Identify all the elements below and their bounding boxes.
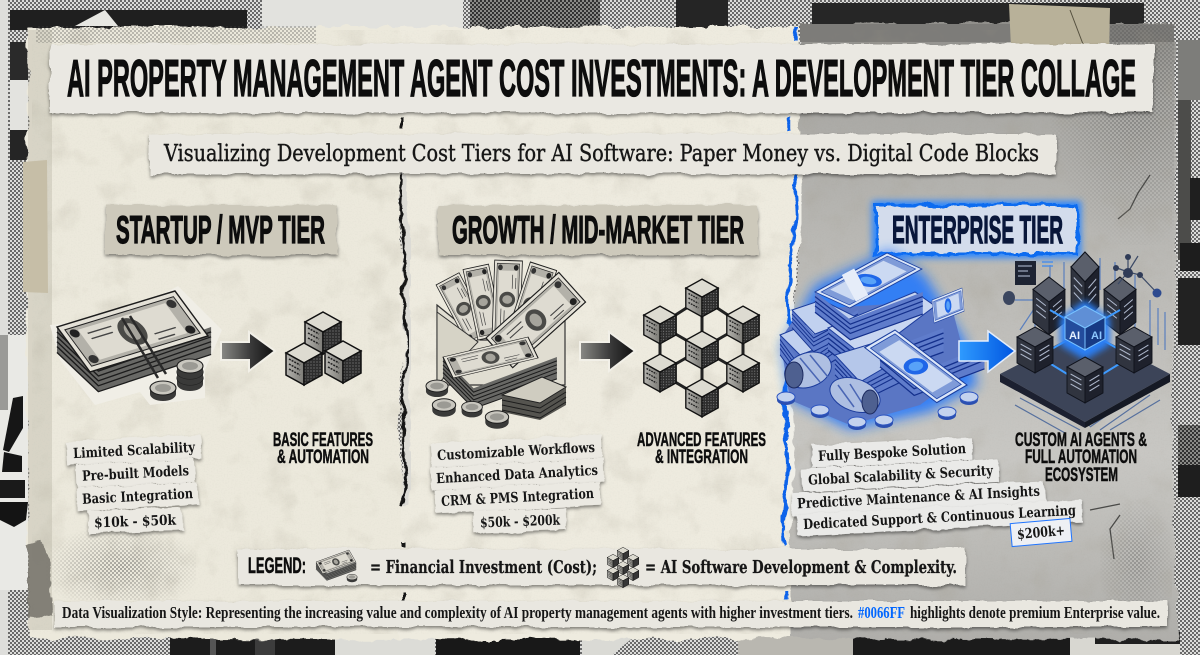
tier heading: enterprise: [872, 201, 1081, 258]
label: basic features: & AUTOMATION: [277, 447, 369, 468]
subtitle: [149, 134, 1056, 174]
icon: three code cubes: [286, 312, 361, 385]
legend: = Financial Investment (Cost);: [370, 557, 597, 578]
label: advanced features: [637, 430, 766, 468]
subtitle: Visualizing Development Cost Tiers for AI Software: Paper Money vs. Digital Code Blocks: [163, 141, 1039, 167]
bullets: startup: $10k - $50k: [94, 513, 177, 531]
bullets: growth: [430, 435, 605, 534]
tape strips: [23, 4, 1110, 293]
bullets: enterprise: Dedicated Support & Continuous Learning: [803, 503, 1076, 533]
bullets: startup: Pre-built Models: [82, 463, 189, 485]
arrow: enterprise: [959, 331, 1015, 372]
bullets: enterprise: Fully Bespoke Solution: [818, 441, 966, 465]
legend: LEGEND:: [248, 553, 306, 578]
icon: AI automation ecosystem: AI: [1091, 330, 1102, 342]
label: basic features: BASIC FEATURES: [273, 430, 373, 451]
bullets: startup: Limited Scalability: [73, 440, 196, 462]
footer note: Data Visualization Style: Representing the increasing value and complexity of AI property management agents with higher investment tiers.: [62, 603, 853, 622]
label: advanced features: ADVANCED FEATURES: [637, 430, 766, 451]
legend: [238, 547, 965, 588]
torn divider: startup / growth: [400, 118, 410, 600]
bullets: enterprise: Predictive Maintenance & AI Insights: [797, 484, 1040, 512]
bullets: growth: $50k - $200k: [480, 513, 561, 531]
label: custom AI agents: FULL AUTOMATION: [1025, 447, 1137, 468]
icon: enterprise money pile with blue glow: [777, 250, 984, 430]
arrow: growth: [580, 332, 635, 371]
icon: startup money stack with coins: [50, 286, 222, 405]
tier heading: startup: STARTUP / MVP TIER: [116, 209, 325, 252]
footer note: [54, 601, 1166, 627]
legend icon: money: [316, 550, 357, 582]
bullets: startup: Basic Integration: [82, 486, 193, 508]
icon: AI automation ecosystem: AI: [1069, 330, 1080, 342]
bullets: startup: [66, 435, 202, 534]
footer note: #0066FF: [858, 603, 905, 622]
bullets: enterprise: $200k+: [1016, 523, 1066, 543]
label: custom AI agents: ECOSYSTEM: [1045, 465, 1118, 486]
icon: connected code cubes: [644, 279, 759, 417]
bullets: growth: Customizable Workflows: [437, 440, 595, 464]
tier heading: startup: [105, 205, 337, 255]
panel: growth paper: [398, 27, 802, 640]
label: advanced features: & INTEGRATION: [655, 447, 748, 468]
icon: envelope with money: [426, 260, 586, 429]
icon: AI automation ecosystem: [1000, 252, 1170, 433]
bullets: enterprise: Global Scalability & Security: [808, 463, 994, 489]
tier heading: growth: [438, 205, 758, 255]
panel: enterprise paper: [790, 24, 1178, 640]
panel: startup paper: [26, 27, 410, 640]
tier heading: growth: GROWTH / MID-MARKET TIER: [452, 209, 744, 252]
label: custom AI agents: [1015, 430, 1147, 486]
label: basic features: [273, 430, 373, 468]
bullets: enterprise: [792, 437, 1082, 547]
bullets: growth: CRM & PMS Integration: [441, 486, 594, 510]
arrow: startup: [221, 332, 275, 371]
torn divider: blue enterprise edge: [782, 28, 800, 600]
legend icon: cubes: [607, 547, 639, 588]
legend: = AI Software Development & Complexity.: [645, 557, 957, 578]
bullets: growth: Enhanced Data Analytics: [436, 463, 599, 487]
